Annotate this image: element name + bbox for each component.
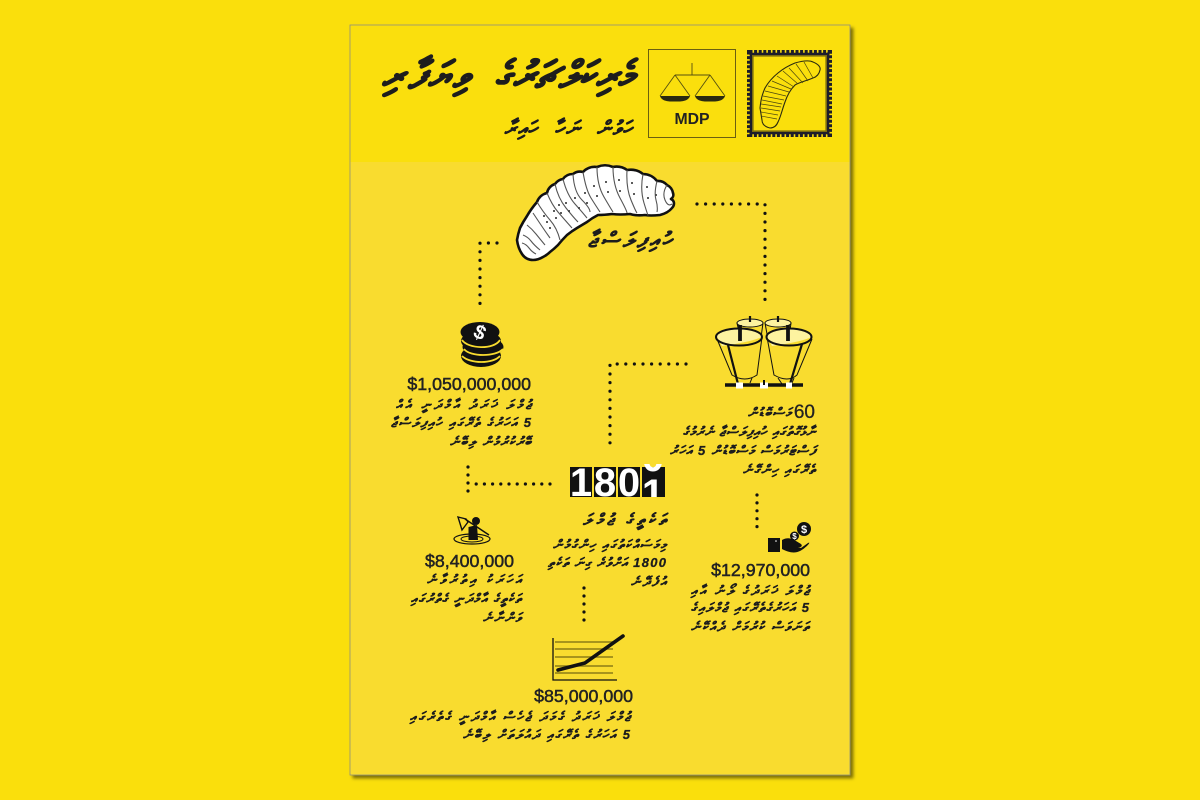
stat: fisher amount: $8,400,000 (425, 551, 514, 571)
arrow: dotted connector, sea cucumber to coins (480, 243, 497, 310)
text block: coins description: ޖުމްލަ ޚަރަދު އާމްދަނީ އެއް (396, 397, 534, 414)
arrow: dotted connector, counter text to chart (582, 588, 586, 628)
heading: counter caption: ތަކެތީގެ ޖުމްލަ (582, 512, 669, 531)
text block: coins description: 5 އަހަރުގެ ތެރޭގައި ހުއިފިލަސްޖާ (391, 415, 532, 431)
text block: counter description: 1800 އަށްވުރެ ގިނަ ތަކެތި (547, 555, 667, 571)
label: sea cucumber: ހުއިފިލަސްޖާ (588, 228, 674, 252)
text block: chart description: 5 އަހަރުގެ ތެރޭގައި ދައުލަތަށް ލިބޭނެ (463, 727, 631, 743)
icon: odometer 1801: 1 (642, 472, 664, 516)
text block: coins description (391, 397, 534, 450)
icon: stack of coins: $ (470, 321, 489, 345)
panel: poster sheet (350, 25, 850, 775)
text block: chart description: ޖުމްލަ ޚަރަދު ގެމަދަ ޖެހެސް އާމްދަނީ ގެތެރެގައި (409, 709, 633, 726)
icon: hand receiving coins: $ (792, 532, 797, 541)
heading: title: މެރިކަލްޗަރުގެ (495, 55, 639, 97)
stat: sixty: މަސްބޮޑުން (748, 405, 794, 420)
stat: coins amount: $1,050,000,000 (407, 374, 531, 394)
icon: large sea cucumber (517, 165, 674, 260)
stat: sixty: 60 (794, 402, 815, 423)
text block: fisher description: ވަންނާނެ (483, 610, 524, 625)
stat: sixty (748, 402, 815, 423)
text block: counter description: މިމަސައްކަތުގައި ހިންގުމުން (553, 537, 669, 553)
icon: odometer 1801: 8 (594, 461, 616, 505)
stat: hand amount: $12,970,000 (711, 560, 810, 580)
stat: chart amount: $85,000,000 (534, 686, 633, 706)
chart: rising line (553, 636, 623, 680)
text block: chart description (409, 709, 633, 743)
text block: fisher description: އަހަރަކު އިތުރުވާނެ (427, 572, 524, 588)
arrow: dotted connector, counter to fisher (468, 467, 550, 499)
text block: hand description (690, 583, 812, 634)
text block: coins description: ބޭރުކުރުމުން ލިބޭނެ (450, 434, 534, 450)
heading: title: ވިޔަފާރި (382, 54, 474, 97)
arrow: dotted connector, sea cucumber to tanks (697, 204, 765, 302)
text block: tanks description: ނާޅުގޮތުގައި ހުއިފިލަސްޖާ ނެރުމުގެ (683, 424, 817, 440)
heading: title (382, 54, 639, 97)
text block: tanks description: ފަސްޓަރުމަސް މަސްބޮޑުން 5 އަހަރު (669, 443, 819, 458)
text block: hand description: ޖުމްލަ ޚަރަދުގެ ލޯނު އާއި (690, 583, 812, 599)
icon: MDP scales logo: MDP (674, 111, 710, 128)
icon: odometer 1801: 0 (618, 461, 640, 505)
text block: hand description: ތަނަވަސް ކުރުމަށް ދެއްކޭނެ (691, 619, 811, 634)
text block: fisher description (410, 572, 524, 625)
icon: fisher with net (454, 517, 490, 544)
text block: hand description: 5 އަހަރުގެތެރޭގައި ޖުމްލައިގެ (691, 600, 810, 616)
heading: subtitle: ހަވުން ނަހާ ހައިރާ (504, 117, 635, 140)
text block: tanks description: ތެރޭގައި ހިންގޭނެ (743, 462, 817, 478)
icon: odometer 1801: 1 (570, 461, 592, 505)
arrow: dotted connector, tanks text to hand (755, 495, 759, 527)
icon: MDP scales logo (648, 50, 736, 138)
icon: odometer 1801: 0 (642, 436, 664, 480)
icon: hand receiving coins (768, 522, 811, 552)
arrow: dotted connector, tanks to counter (610, 364, 686, 445)
text block: tanks description (669, 424, 819, 478)
text block: counter description (547, 537, 669, 589)
icon: hand receiving coins: $ (801, 524, 807, 536)
text block: fisher description: ތަކެތީގެ އާމްދަނީ ގެތްރުގައި (410, 591, 523, 608)
icon: stack of coins (460, 321, 504, 367)
text block: counter description: އުފެދޭނެ (631, 574, 668, 589)
icon: tanks (716, 316, 812, 388)
icon: odometer 1801 (570, 464, 665, 497)
icon: stamp with sea cucumber (750, 52, 830, 134)
